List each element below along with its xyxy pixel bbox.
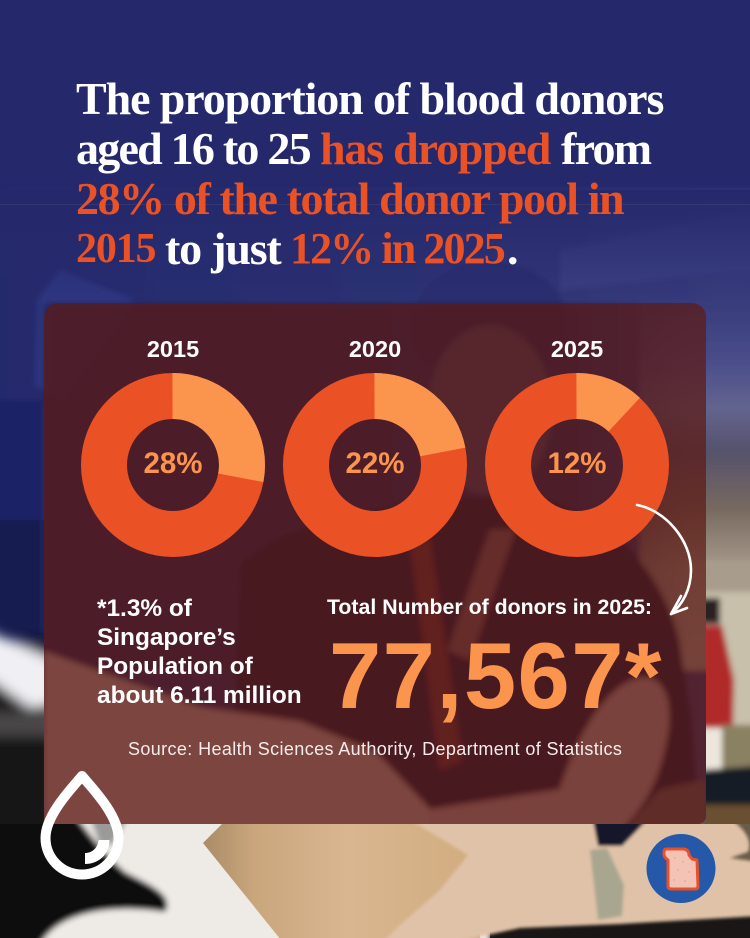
value 28%: 28%	[143, 447, 203, 480]
population note: about 6.11 million	[97, 682, 302, 709]
year label 2025: 2025	[551, 336, 603, 362]
heading: aged 16 to 25	[76, 123, 310, 174]
panel: donor statistics	[44, 303, 706, 824]
total donors label: Total Number of donors in 2025:	[327, 595, 652, 619]
population note: Singapore’s	[97, 624, 236, 651]
total donors figure: 77,567*	[329, 623, 663, 728]
heading: to just	[165, 223, 281, 274]
value 12%: 12%	[547, 447, 607, 480]
population note	[97, 595, 302, 709]
heading: The proportion of blood donors	[76, 73, 663, 124]
value 22%: 22%	[345, 447, 405, 480]
population note: Population of	[97, 653, 253, 680]
source: Source: Health Sciences Authority, Department of Statistics	[128, 739, 622, 759]
heading	[76, 73, 664, 274]
heading: from	[561, 123, 650, 174]
background photo: donor and arm	[0, 190, 750, 938]
population note: *1.3% of	[97, 595, 192, 622]
heading: .	[507, 223, 518, 274]
heading: 12% in 2025	[290, 224, 504, 273]
heading: 28% of the total donor pool in	[76, 173, 623, 224]
year label 2015: 2015	[147, 336, 199, 362]
heading: has dropped	[320, 123, 550, 174]
year label 2020: 2020	[349, 336, 401, 362]
heading: 2015	[76, 226, 155, 272]
